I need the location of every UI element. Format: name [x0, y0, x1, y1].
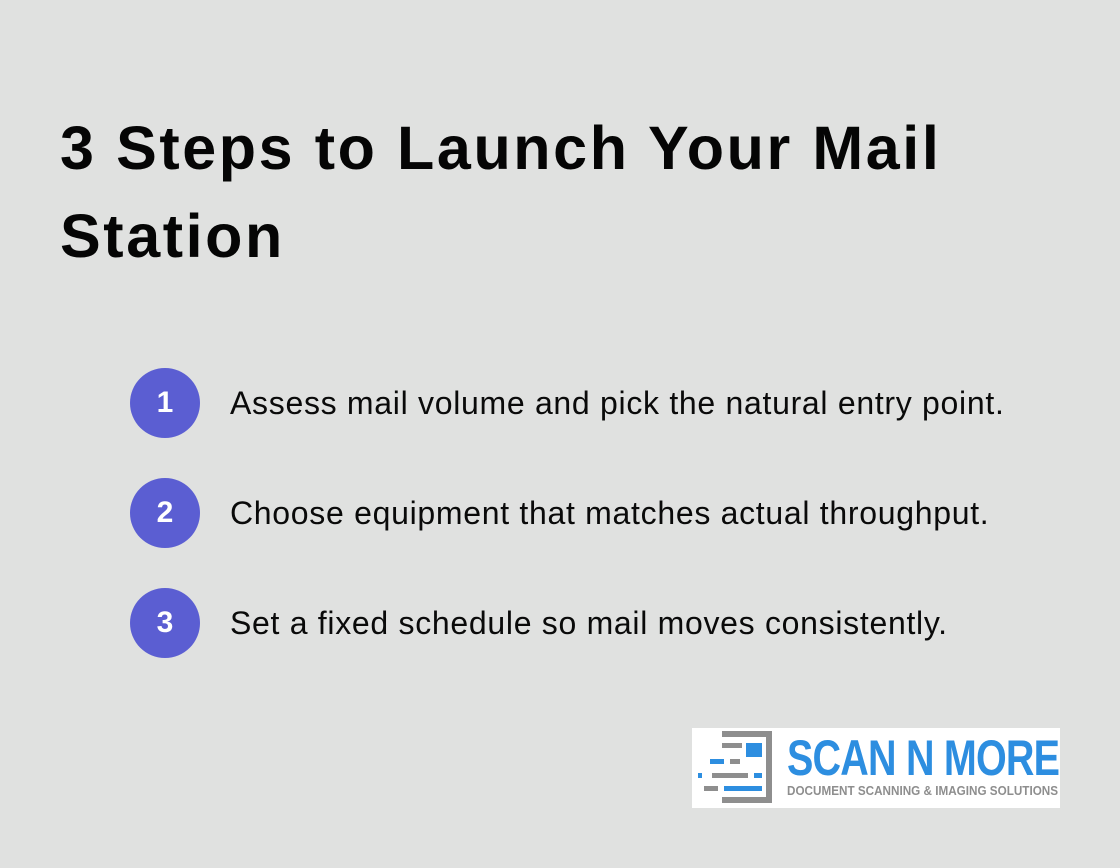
tagline: DOCUMENT SCANNING & IMAGING SOLUTIONS: [787, 783, 1058, 798]
brand name: SCAN N MORE: [787, 730, 1059, 786]
icon: scanner: [698, 731, 772, 803]
step 1: Assess mail volume and pick the natural entry point.: [230, 385, 1005, 421]
step 3: Set a fixed schedule so mail moves consistently.: [230, 605, 948, 641]
step 2: Choose equipment that matches actual throughput.: [230, 495, 989, 531]
logo: [692, 728, 1060, 808]
title: Station: [60, 202, 285, 270]
step 3: 3: [157, 606, 173, 639]
step 3: [130, 588, 948, 658]
step 1: [130, 368, 1005, 438]
step 2: [130, 478, 989, 548]
step 2: 2: [157, 496, 173, 529]
step 1: 1: [157, 386, 173, 419]
title: 3 Steps to Launch Your Mail: [60, 114, 941, 182]
title: [60, 114, 941, 270]
